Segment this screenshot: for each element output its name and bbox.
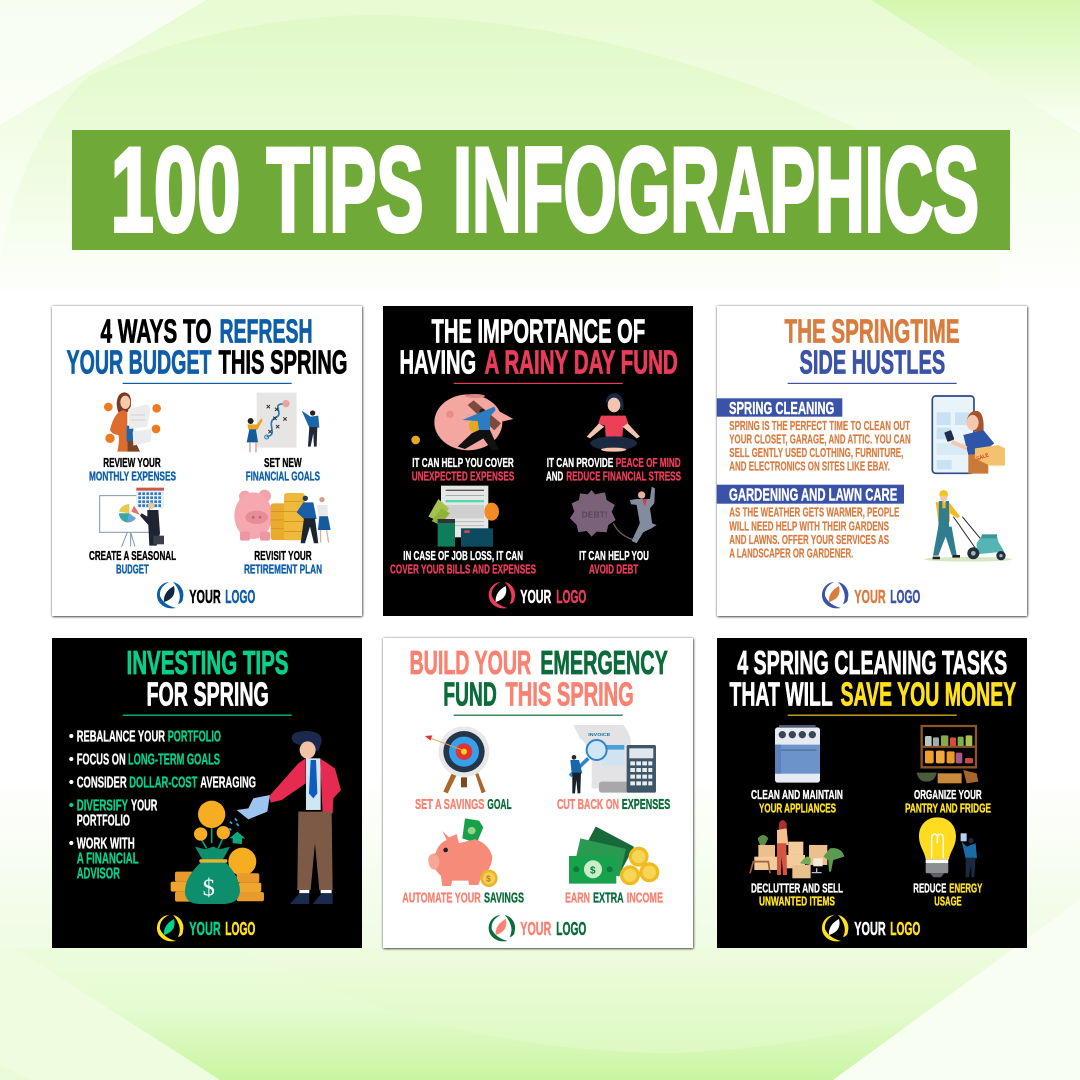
heading: EMERGENCY xyxy=(540,644,668,681)
label group: REDUCE FINANCIAL STRESS xyxy=(566,469,681,484)
label group: IT CAN HELP YOU xyxy=(579,548,649,563)
bullet list xyxy=(69,729,256,882)
icon: cash and coins: $ xyxy=(590,866,596,877)
icon: piggy bank saving xyxy=(428,818,498,887)
section: gardening and lawn care: WILL NEED HELP WITH THEIR GARDENS xyxy=(729,518,889,533)
heading: THE IMPORTANCE OF xyxy=(432,313,645,350)
label group xyxy=(402,796,670,906)
label group: AND xyxy=(546,469,563,484)
label group: EXPENSES xyxy=(622,796,670,813)
heading: FOR SPRING xyxy=(146,676,269,713)
label group: REVIEW YOUR xyxy=(103,455,161,470)
label group: EXTRA xyxy=(593,889,624,906)
bullet list: PORTFOLIO xyxy=(77,813,130,830)
label group: GOAL xyxy=(487,796,512,813)
section: gardening and lawn care: GARDENING AND LAWN CARE xyxy=(729,485,897,505)
label group: IN CASE OF JOB LOSS, IT CAN xyxy=(403,548,523,563)
bullet list: A FINANCIAL xyxy=(77,850,139,867)
label group: AUTOMATE YOUR xyxy=(402,889,481,906)
label group: UNWANTED ITEMS xyxy=(759,894,835,909)
label group: PEACE OF MIND xyxy=(616,455,681,470)
logo: LOGO xyxy=(890,918,920,939)
icon: invoice and calculator xyxy=(570,725,656,793)
logo xyxy=(489,582,586,608)
icon: money plant with coins xyxy=(171,801,264,904)
bullet list: FOCUS ON xyxy=(77,752,126,769)
icon: pantry shelf xyxy=(917,726,978,783)
logo: LOGO xyxy=(225,586,255,607)
icon: piggy bank with man xyxy=(411,394,513,450)
bullet list: DOLLAR-COST xyxy=(129,775,197,792)
logo: YOUR xyxy=(854,918,886,939)
section: spring cleaning: AND ELECTRONICS ON SITES LIKE EBAY. xyxy=(729,458,890,473)
heading: SIDE HUSTLES xyxy=(800,344,945,381)
label group: REDUCE xyxy=(913,880,946,895)
heading: 4 WAYS TO xyxy=(100,313,212,350)
logo: YOUR xyxy=(520,918,552,939)
label group: SAVINGS xyxy=(484,889,524,906)
heading: A RAINY DAY FUND xyxy=(484,344,678,381)
heading xyxy=(400,313,678,384)
logo xyxy=(157,582,255,608)
label group xyxy=(89,455,322,576)
label group: FINANCIAL GOALS xyxy=(246,469,320,484)
heading: BUILD YOUR xyxy=(410,644,531,681)
icon: target xyxy=(425,726,489,793)
label group: AVOID DEBT xyxy=(589,561,638,576)
icon: woman reading bill xyxy=(104,392,161,452)
icon: strategy board xyxy=(247,393,319,452)
section: spring cleaning: SPRING CLEANING xyxy=(729,398,834,418)
label group: SET NEW xyxy=(264,455,302,470)
heading: REFRESH xyxy=(220,313,312,350)
label group: PANTRY AND FRIDGE xyxy=(905,800,991,815)
bullet list: DIVERSIFY xyxy=(77,797,128,814)
panel: springtime side hustles xyxy=(717,306,1027,616)
bullet list: YOUR xyxy=(131,797,158,814)
panel: investing tips xyxy=(52,638,362,948)
icon: piggy bank and couple xyxy=(234,490,331,543)
bullet list: LONG-TERM GOALS xyxy=(128,752,220,769)
icon: meditating woman xyxy=(587,393,640,452)
heading xyxy=(410,644,668,716)
panel: spring cleaning tasks xyxy=(717,638,1027,948)
heading xyxy=(784,313,960,384)
section: gardening and lawn care: AS THE WEATHER GETS WARMER, PEOPLE xyxy=(729,505,899,520)
icon: debt ball and chain: DEBT! xyxy=(582,510,608,520)
icon: bills and expenses xyxy=(428,486,499,547)
label group: CREATE A SEASONAL xyxy=(89,548,176,563)
heading xyxy=(730,644,1016,716)
section: spring cleaning: SPRING IS THE PERFECT TIME TO CLEAN OUT xyxy=(729,418,910,433)
logo: YOUR xyxy=(520,586,552,607)
section: spring cleaning xyxy=(717,398,911,473)
label group: SET A SAVINGS xyxy=(415,796,484,813)
icon: money plant with coins: $ xyxy=(203,874,215,901)
title banner: TIPS xyxy=(266,123,424,257)
icon: man watering plant xyxy=(229,731,341,904)
icon: oven xyxy=(775,725,820,783)
logo: YOUR xyxy=(189,918,221,939)
logo xyxy=(489,915,586,941)
label group: EARN xyxy=(565,889,590,906)
panel: emergency fund xyxy=(383,638,693,948)
label group xyxy=(390,455,681,576)
label group: MONTHLY EXPENSES xyxy=(89,469,176,484)
bullet list: AVERAGING xyxy=(200,775,256,792)
label group: IT CAN HELP YOU COVER xyxy=(412,455,514,470)
bullet list: ADVISOR xyxy=(77,865,120,882)
heading xyxy=(66,313,348,384)
logo xyxy=(822,915,920,941)
logo: LOGO xyxy=(556,918,586,939)
label group: ORGANIZE YOUR xyxy=(914,787,982,802)
label group: CLEAN AND MAINTAIN xyxy=(751,787,843,802)
heading: THIS SPRING xyxy=(218,344,348,381)
bullet list: WORK WITH xyxy=(77,835,135,852)
section: gardening and lawn care xyxy=(717,485,904,560)
logo: LOGO xyxy=(556,586,586,607)
section: spring cleaning: YOUR CLOSET, GARAGE, AND ATTIC. YOU CAN xyxy=(729,431,911,446)
icon: decluttering boxes xyxy=(750,820,844,878)
logo xyxy=(822,582,920,608)
icon: woman selling online: SALE xyxy=(976,452,990,463)
label group: USAGE xyxy=(934,894,962,909)
logo: YOUR xyxy=(854,586,886,607)
label group: ENERGY xyxy=(949,880,982,895)
logo: LOGO xyxy=(225,918,255,939)
section: gardening and lawn care: AND LAWNS. OFFER YOUR SERVICES AS xyxy=(729,532,889,547)
label group: INCOME xyxy=(627,889,663,906)
label group xyxy=(751,787,991,909)
label group: DECLUTTER AND SELL xyxy=(751,880,843,895)
panel: rainy day fund xyxy=(383,306,693,616)
heading: FUND xyxy=(443,676,497,713)
heading: THE SPRINGTIME xyxy=(784,313,960,350)
label group: YOUR APPLIANCES xyxy=(759,800,836,815)
logo: LOGO xyxy=(890,586,920,607)
title banner xyxy=(72,123,1010,257)
heading xyxy=(123,644,292,716)
bullet list: CONSIDER xyxy=(77,775,127,792)
heading: YOUR BUDGET xyxy=(66,344,212,381)
panel: refresh your budget xyxy=(52,306,362,616)
bullet list: REBALANCE YOUR xyxy=(77,729,165,746)
label group: IT CAN PROVIDE xyxy=(547,455,613,470)
icon: light bulb and man xyxy=(919,817,977,877)
section: spring cleaning: SELL GENTLY USED CLOTHING, FURNITURE, xyxy=(729,445,903,460)
logo xyxy=(157,915,255,941)
section: gardening and lawn care: A LANDSCAPER OR GARDENER. xyxy=(729,545,853,560)
label group: COVER YOUR BILLS AND EXPENSES xyxy=(390,561,536,576)
label group: UNEXPECTED EXPENSES xyxy=(412,469,515,484)
icon: man mowing lawn xyxy=(924,490,1012,562)
logo: YOUR xyxy=(189,586,221,607)
icon: cash and coins xyxy=(569,826,659,885)
label group: REVISIT YOUR xyxy=(254,548,312,563)
bullet list: PORTFOLIO xyxy=(168,729,221,746)
heading: INVESTING TIPS xyxy=(126,644,288,681)
icon: debt ball and chain xyxy=(570,487,657,543)
label group: RETIREMENT PLAN xyxy=(244,561,322,576)
heading: HAVING xyxy=(400,344,476,381)
icon: presentation board xyxy=(100,488,164,547)
heading: THIS SPRING xyxy=(506,676,634,713)
icon: woman selling online xyxy=(932,396,1005,474)
icon: piggy bank saving: $ xyxy=(486,874,491,884)
heading: THAT WILL xyxy=(730,676,833,713)
label group: BUDGET xyxy=(116,561,149,576)
label group: CUT BACK ON xyxy=(557,796,619,813)
title banner: 100 xyxy=(110,123,240,257)
icon: invoice and calculator: INVOICE xyxy=(588,732,611,738)
